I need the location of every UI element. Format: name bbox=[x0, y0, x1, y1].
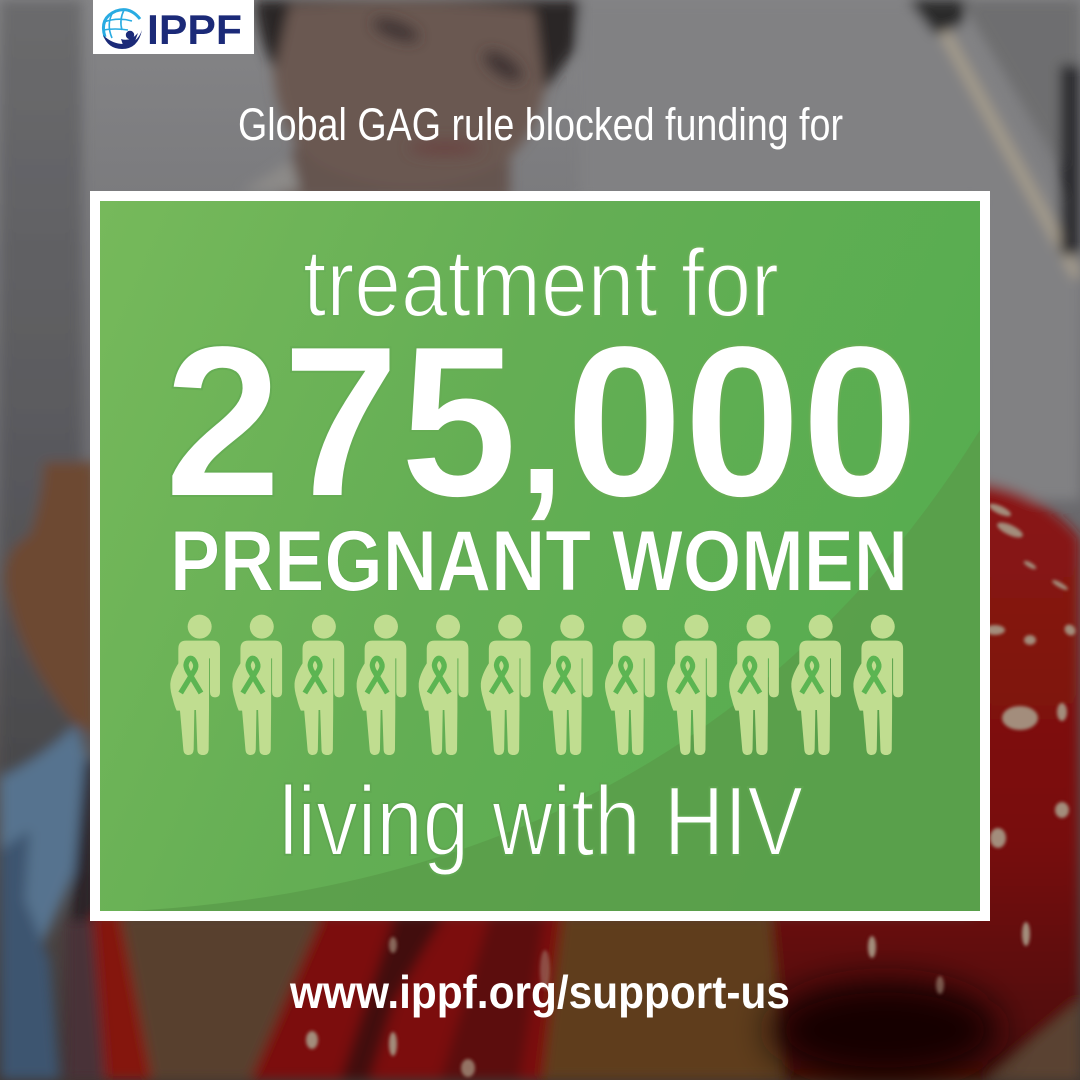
headline: living with HIV: living with HIV bbox=[279, 766, 803, 876]
skin belly left bbox=[120, 915, 322, 1080]
strap stripes bbox=[66, 921, 110, 1080]
IPPF logo bbox=[93, 0, 254, 54]
green panel bbox=[90, 191, 990, 921]
blue sleeve bbox=[0, 725, 88, 1080]
bottom right corner skin bbox=[985, 1000, 1080, 1080]
headline number: , bbox=[518, 337, 565, 532]
panel sheen bbox=[130, 430, 980, 911]
headline: pregnant women: PREGNANT WOMEN bbox=[170, 514, 908, 610]
blue sleeve shadow bbox=[0, 830, 60, 1080]
wall: left band bbox=[0, 0, 82, 790]
headline: treatment for: treatment for bbox=[303, 230, 779, 337]
hair bbox=[255, 0, 580, 90]
face features bbox=[371, 14, 526, 155]
dress centre bbox=[250, 915, 565, 1080]
dress centre shadow 2 bbox=[440, 915, 545, 1080]
dress flowers bbox=[306, 501, 1078, 1077]
skin belly right bbox=[543, 915, 785, 1080]
globe icon bbox=[103, 10, 142, 49]
arm bbox=[5, 462, 95, 735]
dark object right bbox=[1060, 65, 1080, 255]
logo wordmark: IPPF bbox=[147, 6, 242, 53]
collar bbox=[240, 160, 300, 192]
dress centre shadow bbox=[340, 915, 445, 1080]
intro heading: Global GAG rule blocked funding for bbox=[238, 99, 843, 150]
pole bbox=[943, 30, 1078, 277]
dress shadow bottom right bbox=[770, 980, 1000, 1080]
headline number: 000 bbox=[565, 300, 919, 542]
dress right bbox=[770, 482, 1080, 1080]
neck and chest bbox=[280, 110, 510, 200]
pole head bbox=[908, 0, 965, 35]
wall: right bbox=[580, 0, 1080, 500]
dark strap near arm bbox=[70, 760, 95, 925]
wall: top right corner bbox=[960, 0, 1080, 200]
website url: www.ippf.org/support-us bbox=[289, 966, 790, 1018]
headline number: 275 bbox=[164, 300, 524, 542]
pictogram row: 12 pregnant women with ribbons bbox=[170, 615, 903, 755]
face bbox=[273, 0, 547, 188]
red strap bbox=[92, 915, 155, 1080]
